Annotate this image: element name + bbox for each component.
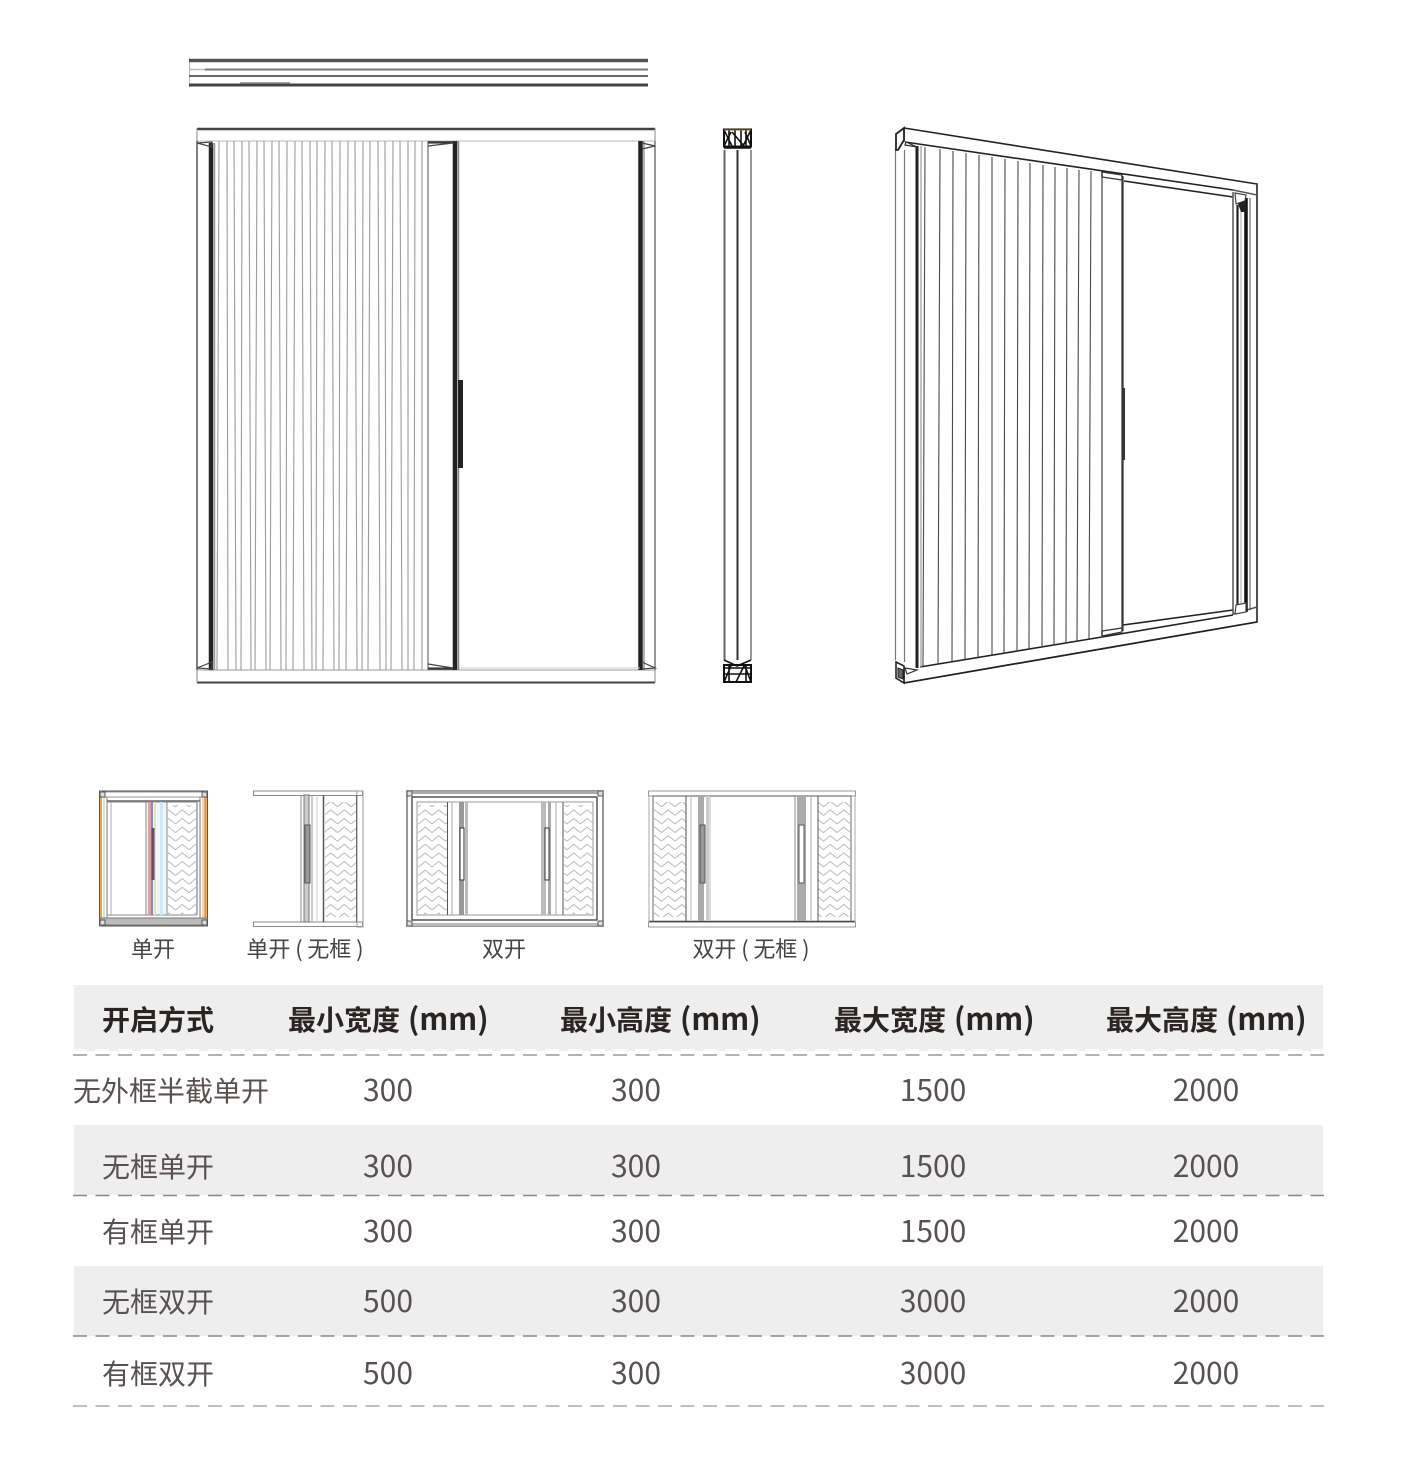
row: frameless double: 3000: [900, 1277, 966, 1321]
table header: 最大高度 (mm): [1106, 995, 1307, 1039]
row: frameless single: [102, 1142, 1239, 1186]
pleats: [923, 147, 1091, 666]
row: framed single: 300: [611, 1207, 661, 1251]
row: half-height frameless single: 1500: [900, 1066, 966, 1110]
shaded row background: frameless single: [74, 1125, 1323, 1195]
header row background: [74, 985, 1323, 1051]
row: frameless double: 2000: [1173, 1277, 1239, 1321]
thumbnail: single opening: [100, 791, 208, 926]
row: framed single: 2000: [1173, 1207, 1239, 1251]
row: framed double: 300: [611, 1349, 661, 1393]
thumbnail: single opening frameless: [254, 791, 363, 927]
sliding leaf with handle: [428, 141, 640, 670]
specification table: [73, 985, 1324, 1406]
row: framed double: 2000: [1173, 1349, 1239, 1393]
row: framed double: [102, 1349, 1239, 1393]
row: framed double: 500: [363, 1349, 413, 1393]
label: double opening: 双开: [482, 932, 526, 964]
row: frameless single: 1500: [900, 1142, 966, 1186]
row: frameless double: 无框双开: [102, 1281, 214, 1321]
label: double opening frameless: 双开 ( 无框 ): [692, 932, 810, 964]
left stile: [896, 128, 921, 683]
row: half-height frameless single: 300: [363, 1066, 413, 1110]
row: frameless single: 300: [363, 1142, 413, 1186]
bottom frame bar: [197, 670, 655, 683]
row: framed single: 1500: [900, 1207, 966, 1251]
top profile block: [724, 130, 751, 148]
frame outline: [896, 128, 1257, 683]
row: framed double: 有框双开: [102, 1353, 214, 1393]
label: single opening frameless: 单开 ( 无框 ): [246, 932, 364, 964]
row: framed single: 300: [363, 1207, 413, 1251]
side section drawing: [724, 130, 751, 682]
table header: 开启方式: [102, 999, 214, 1039]
top rail section drawing: [189, 58, 648, 87]
row: half-height frameless single: 无外框半截单开: [73, 1070, 269, 1110]
right stile: [1233, 192, 1250, 615]
table header: 最小高度 (mm): [560, 995, 761, 1039]
row: frameless single: 300: [611, 1142, 661, 1186]
row: framed single: 有框单开: [102, 1211, 214, 1251]
row: frameless double: [102, 1277, 1239, 1321]
corner wedges: [197, 142, 655, 669]
row: frameless single: 2000: [1173, 1142, 1239, 1186]
table header: [102, 995, 1307, 1039]
perspective view of screen: [896, 128, 1257, 683]
table header: 最大宽度 (mm): [834, 995, 1035, 1039]
label: single opening: 单开: [131, 932, 175, 964]
row: framed single: [102, 1207, 1239, 1251]
row: frameless double: 300: [611, 1277, 661, 1321]
row: half-height frameless single: 2000: [1173, 1066, 1239, 1110]
left and right stiles: [197, 141, 655, 670]
row: framed double: 3000: [900, 1349, 966, 1393]
sliding leaf: [1102, 172, 1125, 637]
front elevation of single-opening pleated screen: [197, 128, 655, 683]
row: frameless single: 无框单开: [102, 1146, 214, 1186]
table header: 最小宽度 (mm): [288, 995, 489, 1039]
row: half-height frameless single: [73, 1066, 1239, 1110]
bottom profile block: [724, 660, 751, 682]
row: frameless double: 500: [363, 1277, 413, 1321]
shaded row background: frameless double: [74, 1266, 1323, 1336]
top frame bar: [197, 128, 655, 141]
thumbnail: double opening frameless: [648, 791, 856, 927]
thumbnail: double opening: [407, 791, 603, 926]
row: half-height frameless single: 300: [611, 1066, 661, 1110]
row divider dashes: [73, 1050, 1324, 1406]
pleated mesh: [217, 141, 422, 670]
